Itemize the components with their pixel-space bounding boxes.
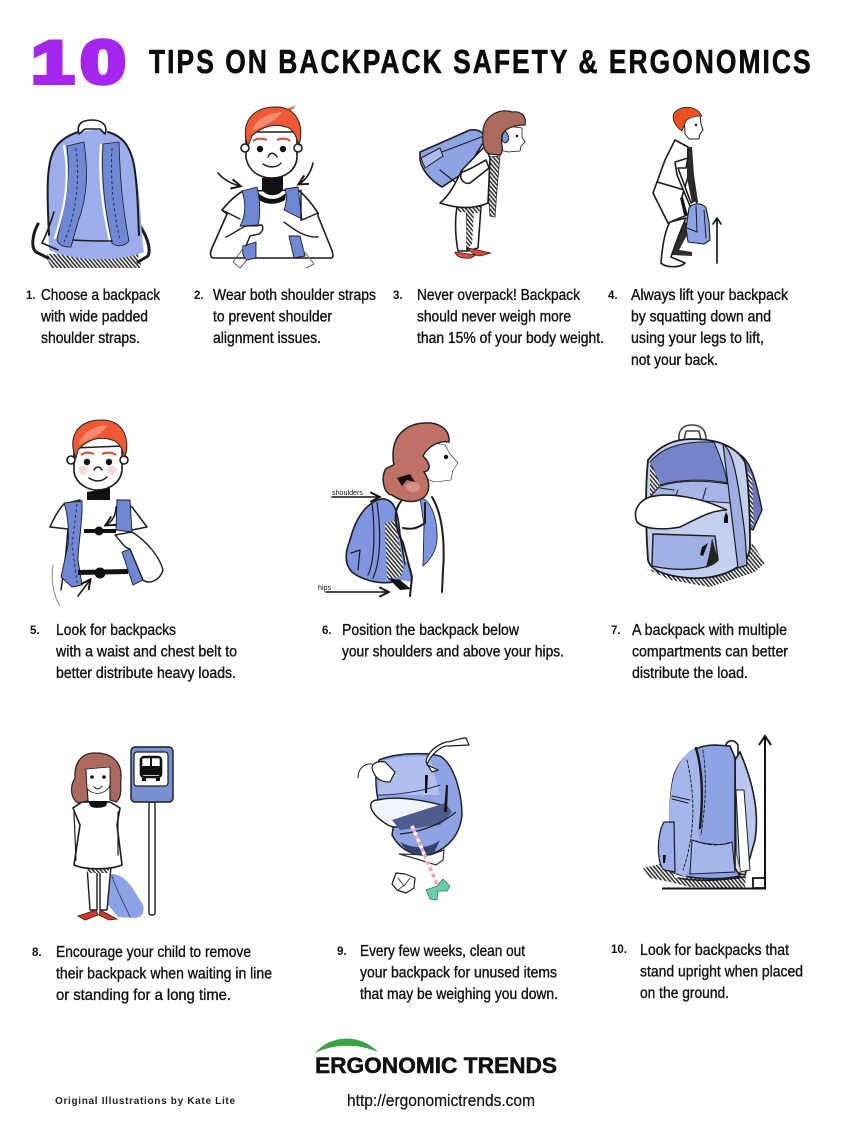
panel: tip 2 xyxy=(194,106,376,347)
icon: boy squatting to lift bag xyxy=(653,107,710,267)
logo: Ergonomic Trends xyxy=(315,1039,557,1078)
icon: girl bent over with overpacked bag xyxy=(420,111,525,258)
text: tip 2: 2. xyxy=(194,290,204,302)
text: tip 5: with a waist and chest belt to xyxy=(55,644,237,660)
text: tip 8 xyxy=(32,944,272,1004)
callout: hips arrow: hips xyxy=(318,583,331,592)
text: tip 7 xyxy=(611,622,788,682)
big number 10 xyxy=(31,29,126,96)
panel: tip 5 xyxy=(30,420,237,682)
icon: backpack with compartments xyxy=(635,425,765,587)
text: tip 1: shoulder straps. xyxy=(41,330,140,347)
panel: tip 8 xyxy=(32,747,272,1004)
panel: tip 4 xyxy=(608,107,788,369)
text: tip 6: your shoulders and above your hips. xyxy=(342,644,564,660)
text: tip 4: Always lift your backpack xyxy=(631,287,788,304)
arrow: lift upward xyxy=(713,218,721,263)
text: tip 7: A backpack with multiple xyxy=(632,622,787,639)
icon: right-angle axis arrow xyxy=(662,736,771,888)
text: tip 5: better distribute heavy loads. xyxy=(56,665,236,682)
text: tip 9 xyxy=(337,943,558,1003)
text: tip 4 xyxy=(608,287,788,369)
text: tip 4: 4. xyxy=(608,290,618,302)
credit line: Original Illustrations by Kate Lite xyxy=(55,1096,235,1107)
text: tip 1: with wide padded xyxy=(40,308,148,326)
arrow: chest belt xyxy=(106,507,116,525)
text: tip 6 xyxy=(322,622,564,660)
text: tip 10: 10. xyxy=(611,944,627,956)
text: tip 8: Encourage your child to remove xyxy=(56,944,251,961)
icon: emptying upside-down backpack xyxy=(358,738,469,900)
text: tip 3: Never overpack! Backpack xyxy=(417,287,580,304)
panel: tip 7 xyxy=(611,425,788,682)
arrow: right shoulder xyxy=(299,163,313,184)
text: tip 10: Look for backpacks that xyxy=(640,942,790,959)
text: tip 5: Look for backpacks xyxy=(56,622,176,639)
big number 10: 0 xyxy=(80,29,126,96)
text: tip 10 xyxy=(611,942,803,1002)
text: tip 9: Every few weeks, clean out xyxy=(360,943,526,960)
icon: girl at bus stop xyxy=(72,753,144,920)
text: tip 8: 8. xyxy=(32,947,42,959)
text: tip 9: that may be weighing you down. xyxy=(360,986,558,1003)
text: tip 1: Choose a backpack xyxy=(41,287,160,304)
text: tip 2: Wear both shoulder straps xyxy=(213,287,376,304)
big number 10: 1 xyxy=(31,29,74,96)
text: tip 7: distribute the load. xyxy=(632,665,748,682)
callout: hips arrow xyxy=(318,583,388,592)
panel: tip 9 xyxy=(337,738,558,1003)
text: tip 3: 3. xyxy=(393,290,403,302)
text: tip 6: Position the backpack below xyxy=(342,622,520,639)
text: tip 4: using your legs to lift, xyxy=(631,330,764,347)
callout: shoulders arrow xyxy=(332,488,379,497)
text: tip 8: their backpack when waiting in line xyxy=(56,966,272,982)
text: tip 10: stand upright when placed xyxy=(640,964,803,980)
text: tip 3: should never weigh more xyxy=(417,308,571,326)
text: tip 4: not your back. xyxy=(631,352,718,369)
text: tip 3 xyxy=(393,287,604,347)
icon: upright backpack beside right angle xyxy=(643,741,757,888)
text: tip 5: 5. xyxy=(30,625,40,637)
text: tip 2: to prevent shoulder xyxy=(213,308,332,326)
callout: shoulders arrow: shoulders xyxy=(332,488,363,497)
icon: girl wearing backpack side view xyxy=(346,423,458,596)
text: tip 5 xyxy=(30,622,237,682)
text: tip 8: or standing for a long time. xyxy=(56,987,231,1004)
text: tip 2: alignment issues. xyxy=(213,330,321,347)
website url: http://ergonomictrends.com xyxy=(347,1092,535,1110)
icon: boy wearing both straps xyxy=(211,106,333,268)
icon: boy with chest and waist belts xyxy=(50,420,163,606)
text: tip 2 xyxy=(194,287,376,347)
arrow: waist belt xyxy=(78,580,90,596)
panel: tip 6 xyxy=(318,423,564,660)
text: tip 1: 1. xyxy=(26,290,36,302)
logo wordmark: ERGONOMIC TRENDS xyxy=(315,1053,557,1078)
logo arc xyxy=(315,1039,378,1053)
text: tip 10: on the ground. xyxy=(640,985,729,1002)
text: tip 9: 9. xyxy=(337,946,347,958)
text: tip 3: than 15% of your body weight. xyxy=(417,330,604,347)
text: tip 9: your backpack for unused items xyxy=(360,964,557,982)
panel: tip 1 xyxy=(26,120,160,347)
icon: backpack rear view xyxy=(33,120,149,268)
text: tip 6: 6. xyxy=(322,625,332,637)
panel: tip 3 xyxy=(393,111,604,347)
heading text: TIPS ON BACKPACK SAFETY & ERGONOMICS xyxy=(149,44,811,81)
title xyxy=(31,29,811,96)
text: tip 4: by squatting down and xyxy=(631,309,771,326)
text: tip 1 xyxy=(26,287,160,347)
panel: tip 10 xyxy=(611,736,803,1002)
icon: bus stop sign xyxy=(131,747,173,915)
text: tip 7: compartments can better xyxy=(632,644,788,660)
arrow: left shoulder xyxy=(218,173,240,186)
text: tip 7: 7. xyxy=(611,625,621,637)
